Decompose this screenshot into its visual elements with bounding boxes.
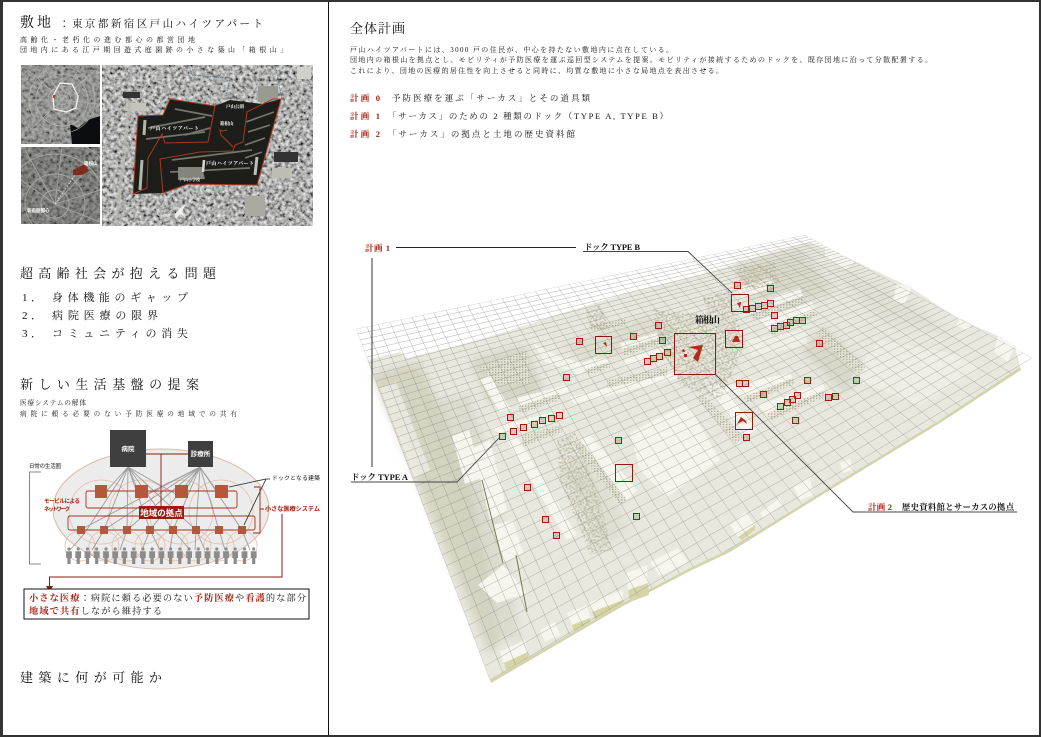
network circles — [65, 480, 257, 561]
heading: site: ：東京都新宿区戸山ハイツアパート — [59, 17, 263, 30]
map: toyama heights aerial — [102, 65, 313, 226]
map: toyama heights aerial: 戸山公園 — [226, 103, 244, 110]
heading: site: 敷地 — [20, 14, 51, 31]
heading: what architecture can do: 建築に何が可能か — [20, 670, 162, 685]
heading: super-aged society problems: 超高齢社会が抱える問題 — [20, 266, 217, 281]
callout: small medicine definition: 小さな医療：病院に頼る必要のない予防医療や看護的な部分 — [29, 592, 306, 603]
heading: new living platform: 新しい生活基盤の提案 — [20, 377, 199, 392]
label: small medical system: 小さな医療システム — [265, 505, 320, 513]
connection lines to people — [70, 467, 250, 550]
label: dock buildings — [229, 474, 320, 525]
callout: small medicine definition: 地域で共有しながら維持する — [29, 605, 162, 616]
callout: plan 2: 歴史資料館とサーカスの拠点 — [902, 502, 1015, 512]
buildings: white slabs — [380, 248, 1015, 663]
list: three problems: 3． — [22, 328, 42, 340]
diagram: small medical system — [29, 430, 320, 592]
hospital: 病院 — [122, 445, 135, 453]
callout: small medicine definition — [24, 589, 309, 619]
map: toyama heights aerial: 戸山ハイツアパート — [206, 160, 254, 167]
list: plan items: 「サーカス」の拠点と土地の歴史資料館 — [388, 129, 575, 139]
list: three problems — [22, 290, 188, 340]
text block: site description — [20, 35, 287, 54]
list: three problems: コミュニティの消失 — [52, 326, 188, 340]
list: three problems: 病院医療の限界 — [52, 308, 158, 322]
dock markers: large boxes — [596, 294, 752, 482]
heading: overall plan: 全体計画 — [350, 21, 405, 36]
text block: plan description: これにより、団地の医療的居住性を向上させると同時に、均質な敷地に小さな局地点を表出させる。 — [350, 66, 723, 75]
heading: site — [20, 14, 263, 31]
list: three problems: 身体機能のギャップ — [52, 290, 188, 304]
list: plan items: 計画 2 — [350, 129, 380, 139]
dock markers: small boxes — [500, 282, 860, 538]
people — [66, 547, 257, 564]
callout: dock type B — [583, 242, 732, 293]
text block: plan description: 戸山ハイツアパートには、3000 戸の住民が、中心を持たない敷地内に点在している。 — [350, 45, 673, 54]
bracket: daily living area: 日常の生活圏 — [29, 462, 61, 470]
map: shinjuku radial inset: 箱根山 — [84, 160, 98, 167]
list: three problems: 2． — [22, 310, 42, 322]
map: shinjuku radial inset: 新宿副都心 — [27, 207, 50, 214]
list: plan items: 「サーカス」のための 2 種類のドック（TYPE A, TYPE B） — [388, 111, 668, 121]
ellipse: daily living area — [53, 449, 269, 569]
dock rows — [68, 491, 255, 530]
callout: plan 1: 計画 1 — [365, 243, 390, 253]
text block: proposal description: 医療システムの解体 — [20, 398, 86, 407]
label: small medical system — [253, 487, 320, 533]
label: dock buildings: ドックとなる建築 — [272, 474, 320, 482]
text block: site description: 高齢化・老朽化の進む都心の都営団地 — [20, 35, 195, 44]
label: mobility network: モービルによる — [44, 497, 80, 505]
callout: dock type B: ドック TYPE B — [584, 242, 640, 252]
clinic: 診療所 — [191, 449, 211, 458]
text block: proposal description — [20, 398, 237, 418]
hospital — [110, 430, 146, 467]
dark gaps between slabs — [482, 480, 527, 612]
label: mobility network: ネットワーク — [44, 505, 70, 513]
label: hakone-yama: 箱根山 — [695, 314, 720, 325]
buildings: facades — [480, 296, 865, 505]
map: tokyo radial inset — [21, 65, 100, 144]
docks: lower row — [77, 526, 246, 534]
docks: upper row — [95, 485, 228, 498]
callout: dock type A: ドック TYPE A — [351, 472, 409, 482]
map: toyama heights aerial: 箱根山 — [220, 120, 234, 127]
text block: site description: 団地内にある江戸期回遊式庭園跡の小さな築山「箱根山」 — [20, 45, 287, 54]
list: plan items: 予防医療を運ぶ「サーカス」とその道具類 — [392, 93, 590, 103]
list: plan items: 計画 1 — [350, 111, 380, 121]
map: shinjuku radial inset — [21, 147, 100, 224]
model base — [367, 242, 1020, 680]
trees — [557, 262, 780, 555]
list: three problems: 1． — [22, 292, 42, 304]
list: plan items: 計画 0 — [350, 93, 380, 103]
text block: proposal description: 病院に頼る必要のない予防医療の地域での共有 — [20, 409, 237, 418]
callout: plan 1 — [365, 243, 576, 467]
bracket: daily living area — [29, 462, 61, 564]
arrow: to definition box — [46, 514, 282, 592]
clinic — [188, 441, 213, 467]
red marks: hakone-yama and bases — [603, 302, 747, 424]
map: toyama heights aerial: 戸山小学校 — [180, 176, 201, 182]
callout: plan 2 — [715, 374, 1017, 512]
text block: plan description: 団地内の箱根山を拠点とし、モビリティが予防医療を運ぶ巡回型システムを提案。モビリティが接続するためのドックを、既存団地に沿って分散配置する。 — [350, 55, 932, 64]
buildings: front olive walls — [504, 525, 755, 670]
list: plan items — [350, 93, 668, 139]
ground shading — [372, 250, 950, 655]
site model — [356, 235, 1032, 691]
text block: plan description — [350, 45, 932, 75]
map: toyama heights aerial: 戸山ハイツアパート — [150, 125, 199, 132]
label: mobility network — [44, 497, 80, 513]
hub label: 地域の拠点 — [140, 508, 183, 518]
grid overlay — [356, 235, 1032, 691]
callout: dock type A — [351, 437, 500, 482]
link to hub — [146, 454, 188, 506]
callout: plan 2: 計画 2 — [868, 502, 892, 512]
